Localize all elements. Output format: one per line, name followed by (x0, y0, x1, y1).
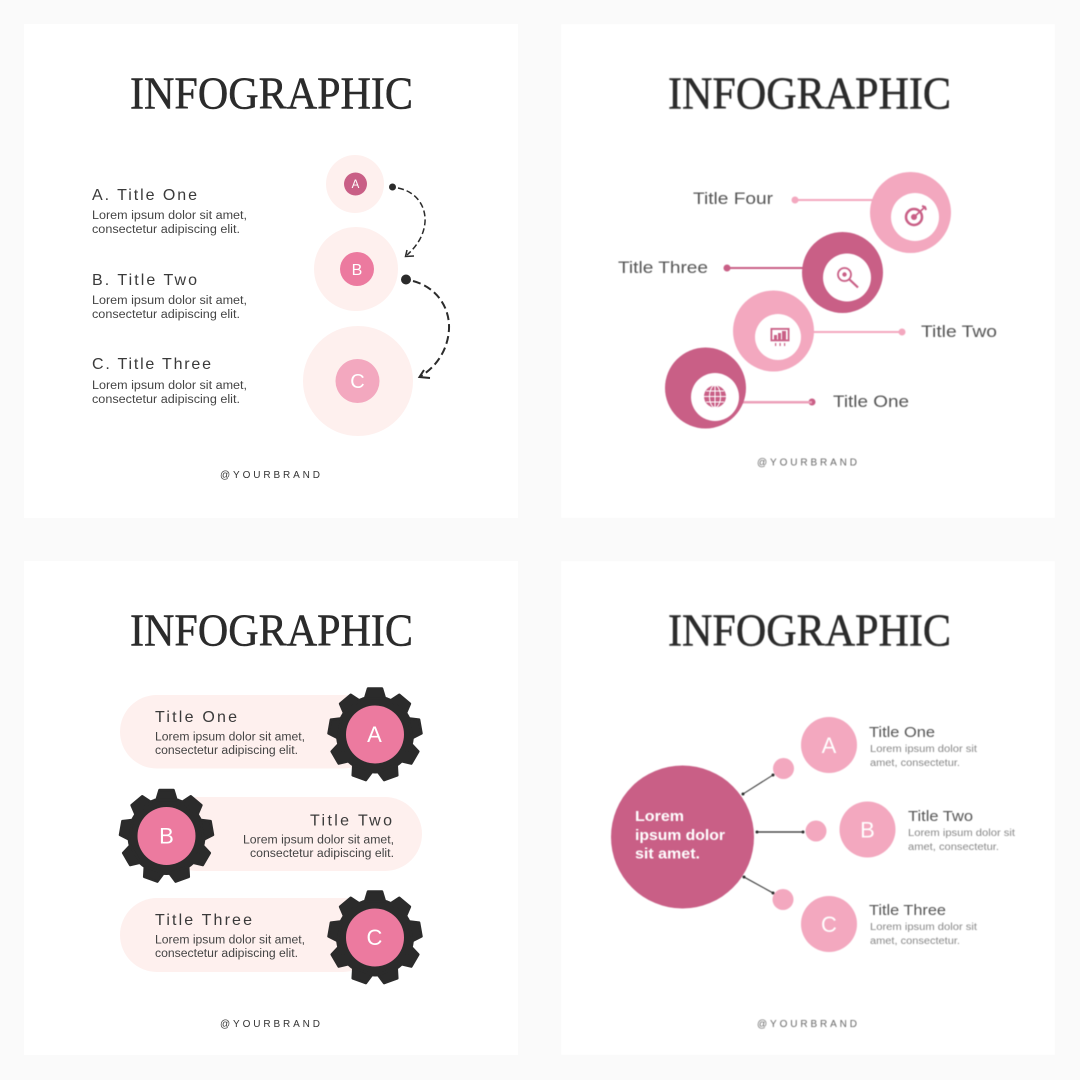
text block: A. Title One: Lorem ipsum dolor sit amet, (92, 210, 247, 222)
arrow: B to C (401, 274, 449, 378)
node C: C (821, 912, 837, 937)
gear A: A (367, 722, 382, 747)
panel: diagonal rings (561, 24, 1055, 518)
label: Title Three: Title Three (618, 258, 708, 277)
text block: Title Three (155, 912, 305, 960)
text block: Title Three: amet, consectetur. (870, 936, 960, 947)
brand handle: @YOURBRAND (220, 470, 320, 481)
text block: Title Two: consectetur adipiscing elit. (250, 848, 394, 860)
label: Title Two: Title Two (921, 322, 997, 341)
text block: Title One: amet, consectetur. (870, 758, 960, 769)
text block: B. Title Two: Lorem ipsum dolor sit amet, (92, 295, 247, 307)
brand handle: @YOURBRAND (220, 1019, 320, 1030)
text block: C. Title Three: consectetur adipiscing elit. (92, 394, 240, 406)
icon: target (906, 206, 926, 225)
label: Title Four: Title Four (693, 189, 773, 208)
icon: presentation chart (770, 328, 790, 346)
node A: A (822, 733, 837, 758)
label: Title One: Title One (833, 392, 909, 411)
text block: A. Title One (92, 187, 247, 236)
text block: Title Two: Lorem ipsum dolor sit amet, (243, 834, 394, 846)
gear C (328, 892, 422, 984)
icon: magnifier (838, 268, 858, 288)
text block: Title Two: Lorem ipsum dolor sit (908, 828, 1015, 839)
text block: Title One: Lorem ipsum dolor sit amet, (155, 732, 305, 744)
text block: Title Three: Title Three (869, 902, 946, 919)
icon: globe (704, 386, 726, 408)
node dot B (806, 820, 826, 842)
circle B (314, 227, 398, 311)
text block: Title One: consectetur adipiscing elit. (155, 745, 298, 757)
node B (840, 802, 896, 858)
heading: panel one: INFOGRAPHIC (130, 68, 413, 118)
text block: Title One: Title One (155, 709, 237, 726)
text block: C. Title Three: Lorem ipsum dolor sit amet, (92, 380, 247, 392)
heading: panel four: INFOGRAPHIC (668, 604, 951, 656)
ring: Title Four with target icon (870, 172, 951, 253)
text block: Title Two: amet, consectetur. (908, 842, 999, 853)
gear B (119, 790, 214, 883)
circle A (326, 155, 384, 213)
connector: Title Three (724, 264, 807, 272)
gear B: B (159, 824, 174, 848)
text block: Title Three (869, 902, 977, 947)
hub circle (611, 766, 754, 908)
connector: Title Four (792, 196, 875, 204)
pill: Title Two (160, 797, 422, 871)
text block: C. Title Three (92, 356, 247, 406)
node dot C (772, 889, 794, 910)
text block: B. Title Two (92, 272, 247, 321)
connector: Title One (738, 398, 816, 406)
pill: Title Three (120, 898, 380, 972)
node dot A (773, 758, 794, 779)
text block: C. Title Three: C. Title Three (92, 356, 211, 373)
text block: B. Title Two: B. Title Two (92, 272, 197, 289)
arrow: hub to C (742, 876, 774, 894)
text block: Title One: Lorem ipsum dolor sit (870, 744, 977, 755)
gear C: C (367, 925, 383, 950)
ring: Title One with globe icon (665, 348, 746, 428)
panel: hub and spokes (561, 561, 1055, 1055)
node B: B (860, 818, 875, 842)
text block: Title Two: Title Two (908, 808, 973, 825)
hub circle: Lorem (635, 808, 684, 825)
text block: Title Two (908, 808, 1015, 853)
hub circle: sit amet. (635, 846, 700, 862)
text block: Title Three: Lorem ipsum dolor sit amet, (155, 934, 305, 946)
text block: Title Three: Title Three (155, 912, 252, 929)
ring: Title Two with chart icon (733, 290, 814, 372)
text block: Title Two (243, 812, 394, 860)
text block: B. Title Two: consectetur adipiscing elit. (92, 309, 240, 321)
hub circle: ipsum dolor (635, 827, 725, 844)
arrow: hub to A (742, 774, 774, 796)
text block: Title Two: Title Two (310, 812, 392, 830)
text block: Title One: Title One (869, 724, 935, 741)
pill: Title One (120, 695, 380, 768)
circle C: C (350, 371, 365, 393)
circle C (303, 326, 413, 436)
circle A: A (352, 179, 360, 191)
node C (801, 896, 857, 952)
node A (801, 717, 857, 773)
circle B: B (352, 262, 362, 279)
arrow: A to B (389, 184, 425, 256)
text block: A. Title One: consectetur adipiscing elit. (92, 224, 240, 236)
arrow: hub to B (756, 830, 804, 834)
gear A (328, 688, 422, 781)
heading: panel three: INFOGRAPHIC (130, 604, 413, 656)
text block: Title One (155, 709, 305, 757)
brand handle: @YOURBRAND (757, 458, 857, 468)
panel: gears (24, 561, 518, 1055)
connector: Title Two (810, 328, 906, 336)
heading: panel two: INFOGRAPHIC (668, 68, 951, 118)
text block: A. Title One: A. Title One (92, 187, 197, 204)
brand handle: @YOURBRAND (757, 1019, 857, 1030)
panel: stepped circles (24, 24, 518, 518)
text block: Title Three: consectetur adipiscing elit. (155, 948, 298, 960)
ring: Title Three with magnifier icon (802, 232, 883, 313)
text block: Title Three: Lorem ipsum dolor sit (870, 922, 977, 933)
text block: Title One (869, 724, 977, 769)
